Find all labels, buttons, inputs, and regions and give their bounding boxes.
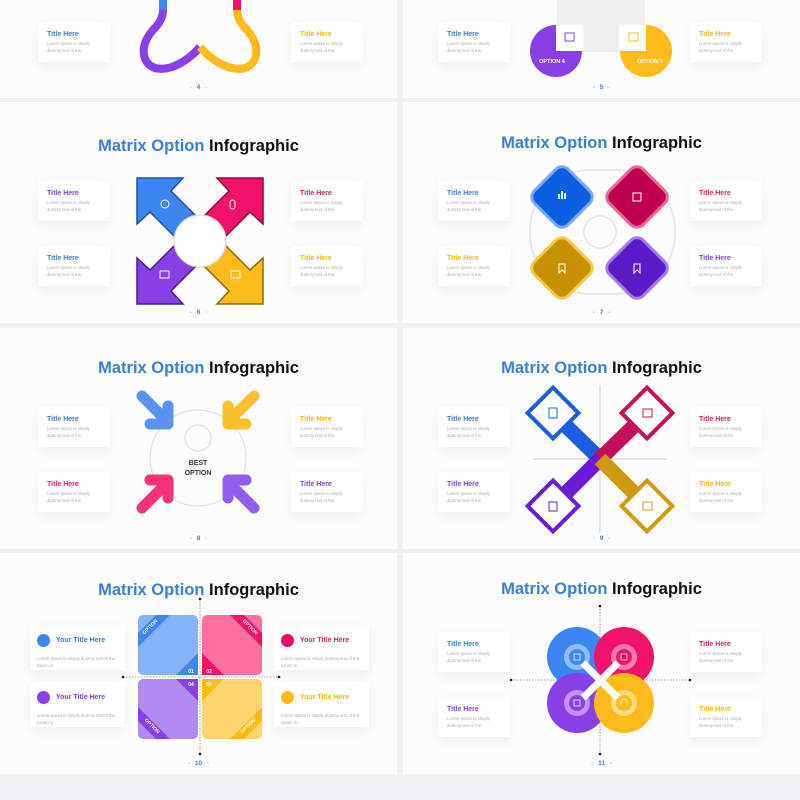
page number: • 10 • [188, 760, 209, 767]
card BL [438, 246, 510, 286]
card BL: Title Here [47, 255, 79, 262]
card right: dummy text of the [699, 48, 733, 52]
card TR: Title Here [699, 416, 731, 423]
card left: Lorem Ipsum is simply [447, 41, 490, 46]
card TL: Lorem Ipsum is simply [447, 200, 490, 205]
card TR [690, 407, 762, 447]
card BR [690, 697, 762, 737]
slide 10 [0, 553, 397, 774]
card TL [438, 181, 510, 221]
card BL: Lorem Ipsum is simply [47, 265, 90, 270]
option circles: OPTION 4 [539, 59, 566, 65]
card TR: dummy text of the [699, 432, 733, 438]
option circles [530, 0, 672, 77]
card BL [38, 472, 110, 512]
slide 8 [0, 328, 397, 549]
card TR [690, 181, 762, 221]
square matrix graphic: 03 [206, 682, 212, 688]
best option graphic: OPTION [185, 470, 211, 477]
card BR [291, 246, 363, 286]
square matrix graphic: 01 [188, 669, 194, 675]
card TR: Lorem Ipsum is simply [699, 651, 742, 656]
slide 9 [403, 328, 800, 549]
card BR: dummy text of the [699, 722, 733, 728]
card BL: Title Here [447, 255, 479, 262]
card left: Title Here [447, 31, 479, 38]
card TL: dummy text of the [447, 432, 481, 438]
card BR [291, 472, 363, 512]
card BL: Title Here [447, 481, 479, 488]
square matrix graphic: OPTION [143, 717, 161, 735]
card TL [30, 625, 125, 670]
card TR: Lorem Ipsum is simply [300, 200, 343, 205]
card TR: Lorem Ipsum is simply [699, 200, 742, 205]
slide 6 [0, 102, 397, 323]
card right [291, 22, 363, 62]
title: Matrix Option Infographic [98, 137, 299, 155]
card BL [38, 246, 110, 286]
slide 4 (partial) [0, 0, 397, 98]
card TR [690, 632, 762, 672]
card BR: Title Here [699, 255, 731, 262]
card left [38, 22, 110, 62]
square matrix graphic: OPTION [141, 618, 159, 636]
card left: dummy text of the [47, 48, 81, 52]
card BL: Your Title Here [56, 694, 105, 701]
card right [690, 22, 762, 62]
card BL: Lorem Ipsum is simply dummy text of the Ipsum is [37, 713, 115, 724]
card TR: Title Here [699, 641, 731, 648]
card TR: dummy text of the [300, 206, 334, 212]
card BL: Lorem Ipsum is simply [447, 265, 490, 270]
wave graphic [140, 0, 260, 73]
card BR: dummy text of the [300, 272, 334, 276]
slide 5 (partial) [403, 0, 800, 98]
card TL: dummy text of the [447, 206, 481, 212]
slide 11 [403, 553, 800, 774]
slide 7 [403, 102, 800, 323]
card BL: Title Here [447, 706, 479, 713]
card BR [690, 246, 762, 286]
card TL: dummy text of the [47, 432, 81, 438]
card BR: Lorem Ipsum is simply [699, 491, 742, 496]
square matrix graphic: 04 [188, 682, 194, 688]
page number: • 5 • [593, 84, 610, 91]
card left: dummy text of the [447, 48, 481, 52]
card TR: dummy text of the [699, 658, 733, 662]
card BR: Title Here [300, 255, 332, 262]
card TL [438, 632, 510, 672]
card BR: dummy text of the [699, 498, 733, 502]
card BL [30, 682, 125, 727]
cross diamonds graphic [524, 384, 676, 534]
card BL: dummy text of the [47, 272, 81, 276]
card TR: dummy text of the [699, 206, 733, 212]
card BL: dummy text of the [47, 498, 81, 502]
card BL [438, 472, 510, 512]
card BL: dummy text of the [447, 722, 481, 728]
card TL: Title Here [447, 641, 479, 648]
card TR: Lorem Ipsum is simply [300, 426, 343, 431]
card TL: Lorem Ipsum is simply [447, 426, 490, 431]
square matrix graphic: OPTION [241, 618, 259, 636]
card TR: Title Here [300, 416, 332, 423]
card TL: Your Title Here [56, 637, 105, 644]
card TL: Title Here [447, 416, 479, 423]
card right: Lorem Ipsum is simply [300, 41, 343, 46]
page number: • 6 • [190, 309, 207, 316]
title: Matrix Option Infographic [98, 581, 299, 599]
option circles: OPTION 3 [637, 59, 663, 65]
circular arrows graphic [510, 604, 692, 756]
card BL [438, 697, 510, 737]
card left: Title Here [47, 31, 79, 38]
card TL: Title Here [47, 190, 79, 197]
page number: • 4 • [190, 84, 207, 91]
page number: • 8 • [190, 535, 207, 542]
page number: • 11 • [591, 760, 612, 767]
card TL: Lorem Ipsum is simply [447, 651, 490, 656]
card left [438, 22, 510, 62]
card BL: dummy text of the [447, 498, 481, 502]
card BL: Lorem Ipsum is simply [447, 716, 490, 721]
title: Matrix Option Infographic [501, 134, 702, 152]
card TL: Lorem Ipsum is simply dummy text of the Ipsum is [37, 656, 115, 668]
card BR [274, 682, 369, 727]
card TR: Title Here [699, 190, 731, 197]
card BR: Title Here [300, 481, 332, 488]
card BL: Lorem Ipsum is simply [47, 491, 90, 496]
card BR [690, 472, 762, 512]
card right: Title Here [300, 31, 332, 38]
card TR: Your Title Here [300, 637, 349, 644]
card BR: Lorem Ipsum is simply [699, 265, 742, 270]
card BR: Lorem Ipsum is simply [699, 716, 742, 721]
title: Matrix Option Infographic [501, 359, 702, 377]
card TR [291, 407, 363, 447]
card TL: Lorem Ipsum is simply [47, 200, 90, 205]
card BR: Title Here [699, 706, 731, 713]
square matrix graphic [122, 598, 280, 756]
card BL: Title Here [47, 481, 79, 488]
card TL [438, 407, 510, 447]
best option graphic: BEST [189, 460, 208, 467]
card TR: dummy text of the [300, 432, 334, 438]
card TL [38, 407, 110, 447]
card BR: Lorem Ipsum is simply [300, 491, 343, 496]
square matrix graphic: OPTION [239, 717, 257, 735]
card BR: Lorem Ipsum is simply [300, 265, 343, 270]
card right: Lorem Ipsum is simply [699, 41, 742, 46]
card BR: dummy text of the [300, 498, 334, 502]
card TR: Lorem Ipsum is simply dummy text of the Ipsum is [281, 656, 359, 668]
page number: • 9 • [593, 535, 610, 542]
card TR [274, 625, 369, 670]
card TL: Lorem Ipsum is simply [47, 426, 90, 431]
card right: dummy text of the [300, 48, 334, 52]
arrows graphic [136, 177, 264, 305]
card BR: Title Here [699, 481, 731, 488]
card TL: Title Here [47, 416, 79, 423]
card right: Title Here [699, 31, 731, 38]
diamonds graphic [529, 165, 676, 300]
card BR: Lorem Ipsum is simply dummy text of the Ipsum is [281, 713, 359, 724]
card left: Lorem Ipsum is simply [47, 41, 90, 46]
card TR [291, 181, 363, 221]
card TL: dummy text of the [447, 658, 481, 662]
best option graphic [136, 390, 260, 514]
square matrix graphic: 02 [206, 669, 212, 675]
card TL: Title Here [447, 190, 479, 197]
page number: • 7 • [593, 309, 610, 316]
card BR: dummy text of the [699, 272, 733, 276]
card TR: Lorem Ipsum is simply [699, 426, 742, 431]
title: Matrix Option Infographic [501, 580, 702, 598]
card BL: Lorem Ipsum is simply [447, 491, 490, 496]
card TR: Title Here [300, 190, 332, 197]
card BL: dummy text of the [447, 272, 481, 276]
card TL [38, 181, 110, 221]
title: Matrix Option Infographic [98, 359, 299, 377]
card TL: dummy text of the [47, 206, 81, 212]
card BR: Your Title Here [300, 694, 349, 701]
